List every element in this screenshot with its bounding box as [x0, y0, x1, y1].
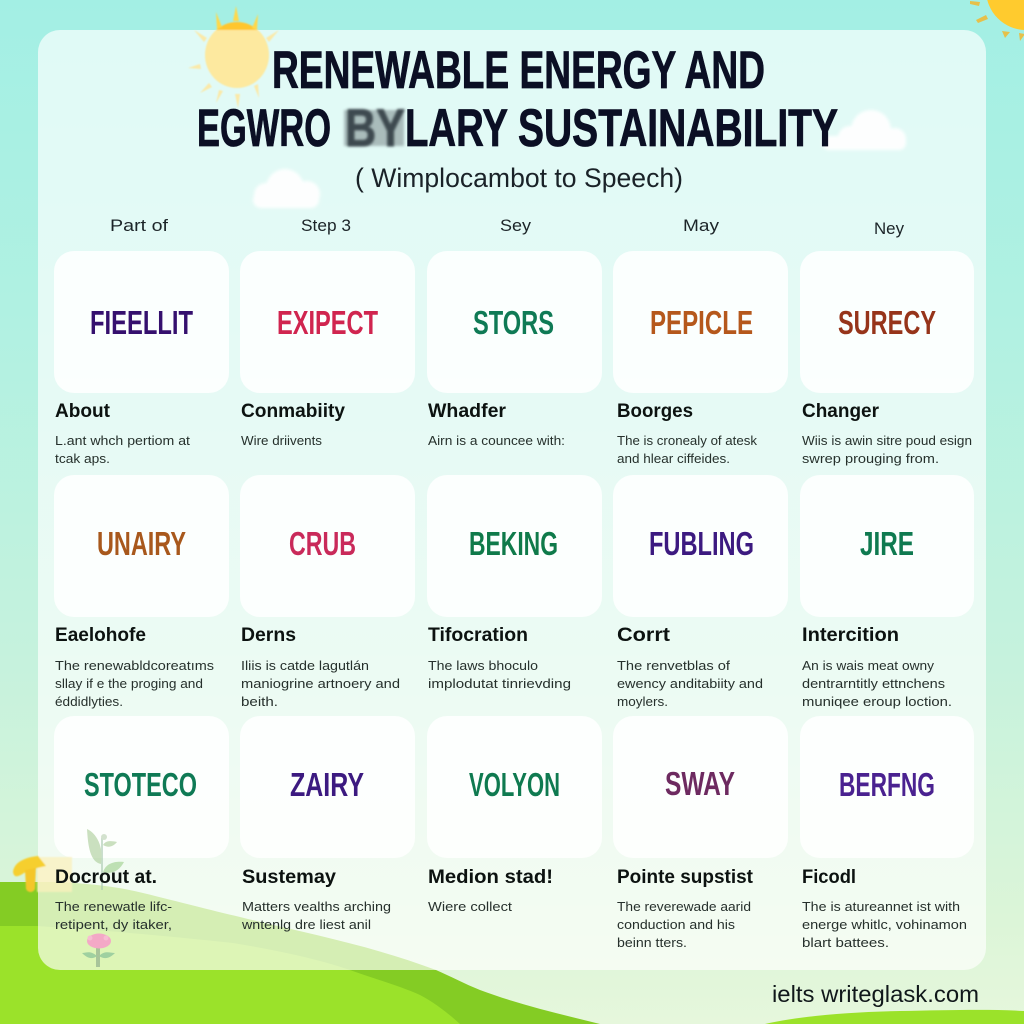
item: Conmabiity: Wire driivents — [241, 433, 322, 448]
item: Boorges: PEPICLE — [650, 304, 753, 341]
item: Whadfer — [427, 251, 602, 448]
item: Intercition: An is wais meat owny — [802, 658, 934, 673]
item: Changer: Wiis is awin sitre poud esign — [802, 433, 972, 448]
item: Conmabiity: Conmabiity — [241, 401, 345, 422]
item: Boorges: Boorges — [617, 401, 693, 422]
item: Medion stad!: VOLYON — [469, 766, 560, 803]
item: Tifocration: The laws bhoculo — [428, 658, 538, 673]
icon: pink flower — [82, 934, 115, 967]
item: Ficodl — [800, 716, 974, 950]
text: Docrout at. — [55, 867, 172, 932]
column headers: Sey — [500, 216, 532, 235]
item: Pointe supstist: The reverewade aarid — [617, 899, 751, 914]
item: Whadfer: STORS — [473, 304, 554, 341]
item: Boorges — [613, 251, 788, 466]
item: Whadfer: Whadfer — [428, 401, 507, 422]
item: Conmabiity: EXIPECT — [277, 304, 378, 341]
item: Sustemay: Matters vealths arching — [242, 899, 391, 914]
item: Eaelohofe: The renewabldcoreatıms — [55, 658, 214, 673]
item: Sustemay — [240, 716, 415, 932]
item: About: FIEELLIT — [90, 304, 193, 341]
card: STOTECO: STOTECO — [84, 766, 197, 803]
item: Intercition: Intercition — [802, 625, 899, 646]
item: Tifocration: Tifocration — [428, 625, 528, 646]
item: About: tcak aps. — [55, 451, 110, 466]
item: Medion stad!: Wiere collect — [428, 899, 512, 914]
icon: sprout — [87, 829, 124, 890]
icon: sun top left — [188, 6, 279, 108]
item: Eaelohofe: éddidlyties. — [55, 694, 123, 709]
item: Pointe supstist: beinn tters. — [617, 935, 687, 950]
item: Boorges: and hlear ciffeides. — [617, 451, 730, 466]
item: Pointe supstist: Pointe supstist — [617, 867, 754, 888]
item: Derns: beith. — [241, 694, 278, 709]
item: Ficodl: Ficodl — [802, 867, 856, 888]
item: Medion stad!: Medion stad! — [428, 867, 553, 888]
item: Whadfer: Airn is a councee with: — [428, 433, 565, 448]
cloud left — [253, 169, 320, 208]
item: Corrt: The renvetblas of — [617, 658, 730, 673]
hills: right bright green — [765, 1010, 1024, 1024]
item: Sustemay: ZAIRY — [290, 766, 364, 803]
title: LARY — [405, 99, 508, 158]
item: Derns: Iliis is catde lagutlán — [241, 658, 369, 673]
item: Eaelohofe — [54, 475, 229, 709]
item: Changer: swrep prouging from. — [802, 451, 939, 466]
title: BY — [345, 99, 405, 158]
text: Docrout at.: The renewatle lifc- — [55, 899, 172, 914]
column headers: May — [683, 216, 720, 235]
item: Tifocration: implodutat tinrievding — [428, 676, 571, 691]
item: Eaelohofe: sllay if e the proging and — [55, 676, 203, 691]
title — [197, 41, 838, 158]
title: RENEWABLE ENERGY AND — [272, 41, 765, 100]
text: Docrout at.: retipent, dy itaker, — [55, 917, 172, 932]
item: Derns: CRUB — [289, 525, 356, 562]
item: Sustemay: Sustemay — [242, 867, 336, 888]
item: Eaelohofe: Eaelohofe — [55, 625, 146, 646]
item: Changer — [800, 251, 974, 466]
footer website text: ielts writeglask.com — [772, 981, 979, 1007]
item: Ficodl: BERFNG — [839, 766, 935, 803]
item: About: About — [55, 401, 111, 422]
title: EGWRO — [197, 99, 331, 158]
item: About: L.ant whch pertiom at — [55, 433, 190, 448]
item: Ficodl: energe whitlc, vohinamon — [802, 917, 967, 932]
item: Changer: Changer — [802, 401, 880, 422]
cloud right — [822, 110, 906, 150]
item: Pointe supstist: conduction and his — [617, 917, 735, 932]
column headers: Step 3 — [301, 216, 351, 235]
item: Tifocration — [427, 475, 602, 691]
item: Changer: SURECY — [838, 304, 936, 341]
item: Derns: maniogrine artnoery and — [241, 676, 400, 691]
item: Corrt: moylers. — [617, 694, 668, 709]
item: Intercition: muniqee eroup loction. — [802, 694, 952, 709]
item: Corrt: ewency anditabiity and — [617, 676, 763, 691]
item: Ficodl: The is atureannet ist with — [802, 899, 960, 914]
item: Pointe supstist: SWAY — [665, 765, 735, 802]
item: Conmabiity — [240, 251, 415, 448]
item: Boorges: The is cronealy of atesk — [617, 433, 757, 448]
hills: dark green — [0, 882, 600, 1024]
card: STOTECO — [54, 716, 229, 858]
icon: sun top right — [970, 0, 1024, 41]
item: Tifocration: BEKING — [469, 525, 558, 562]
item: About — [54, 251, 229, 466]
item: Derns — [240, 475, 415, 709]
item: Corrt — [613, 475, 788, 709]
item: Medion stad! — [427, 716, 602, 914]
item: Corrt: Corrt — [617, 625, 671, 646]
item: Intercition: JIRE — [860, 525, 914, 562]
column headers: Part of — [110, 216, 168, 235]
hills: bright green — [0, 926, 460, 1024]
text: Docrout at.: Docrout at. — [55, 867, 157, 888]
item: Eaelohofe: UNAIRY — [97, 525, 186, 562]
item: Pointe supstist — [613, 716, 788, 950]
item: Ficodl: blart battees. — [802, 935, 889, 950]
subtitle: ( Wimplocambot to Speech) — [355, 163, 683, 193]
item: Sustemay: wntenlg dre liest anil — [241, 917, 371, 932]
item: Corrt: FUBLING — [649, 525, 754, 562]
title: SUSTAINABILITY — [518, 99, 838, 158]
item: Intercition: dentrarntitly ettnchens — [802, 676, 945, 691]
column headers: Ney — [874, 219, 904, 238]
item: Intercition — [800, 475, 974, 709]
item: Derns: Derns — [241, 625, 296, 646]
column headers — [110, 216, 904, 238]
icon: yellow mushroom — [13, 856, 72, 892]
